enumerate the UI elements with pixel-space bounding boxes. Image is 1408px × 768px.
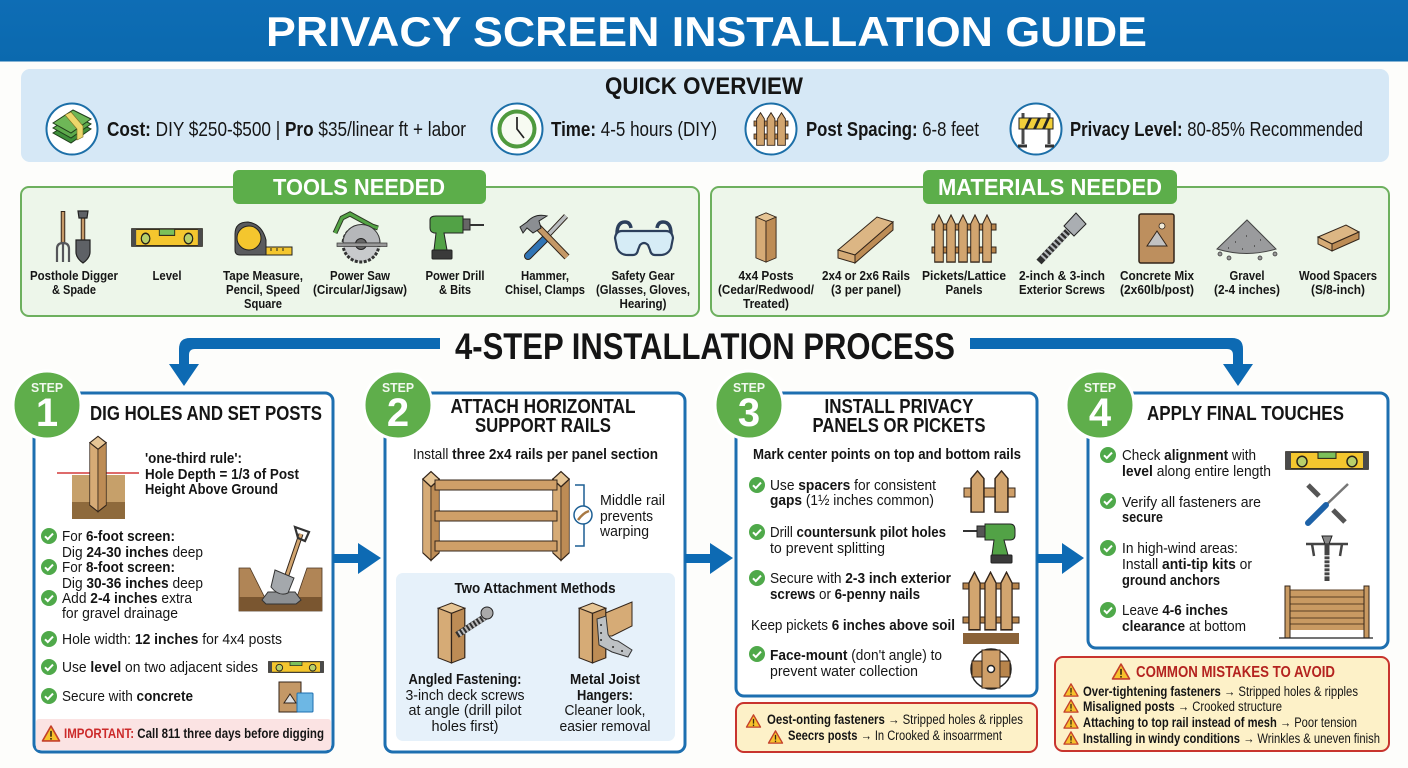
tool: tape measure: Pencil, Speed [226, 282, 300, 297]
checklist: depth items: For 6-foot screen: [62, 528, 175, 545]
method: metal joist hangers [560, 602, 650, 735]
tool: posthole digger and spade: & Spade [52, 282, 96, 297]
text: post spacing: Post Spacing: 6-8 feet [806, 119, 979, 141]
item: face-mount [749, 646, 1011, 689]
material: screws: Exterior Screws [1019, 282, 1105, 297]
item: face-mount: prevent water collection [770, 663, 918, 680]
material: screws: 2-inch & 3-inch [1019, 268, 1105, 283]
text: one-third rule: Height Above Ground [145, 481, 278, 498]
text: one-third rule: 'one-third rule': [145, 450, 242, 467]
list: mistakes: Attaching to top rail instead of mesh → Poor tension [1083, 715, 1357, 730]
item: pilot holes: Drill countersunk pilot holes [770, 524, 946, 541]
list: concrete [41, 682, 313, 712]
tool: power saw: Power Saw [330, 268, 391, 283]
icon: picket fence above soil [963, 572, 1019, 644]
item: clearance [1100, 602, 1246, 635]
arrow: step 1 to 2 [333, 543, 381, 574]
tool: safety gear: Safety Gear [612, 268, 674, 283]
text: keep pickets above soil: Keep pickets 6 inches above soil [751, 617, 955, 634]
panel: step 4 [1066, 371, 1388, 648]
tool: power saw [313, 214, 407, 297]
icon: barricade [1010, 104, 1062, 154]
arrow: step 3 to 4 [1037, 543, 1084, 574]
arrow: step 2 to 3 [685, 543, 733, 574]
list: mistakes [1064, 684, 1380, 746]
material: pickets: Pickets/Lattice [922, 268, 1006, 283]
item: fasteners [1100, 484, 1348, 526]
method: metal joist hangers: Metal Joist [570, 671, 640, 688]
item: pilot holes: to prevent splitting [770, 540, 885, 557]
diagram: rail frame [423, 472, 569, 560]
tool: safety gear [596, 222, 690, 311]
text: privacy level: Privacy Level: 80-85% Recommended [1070, 119, 1363, 141]
text: cost: Cost: DIY $250-$500 | Pro $35/linear ft + labor [107, 119, 466, 141]
checklist: depth items [41, 528, 203, 622]
icon: finished screen [1279, 586, 1373, 638]
item: pilot holes [749, 524, 1015, 563]
item: spacers: Use spacers for consistent [770, 477, 937, 494]
arrow: process right [970, 338, 1253, 386]
tool: power drill: & Bits [439, 282, 471, 297]
icon: fence [746, 104, 796, 154]
tool: hammer and chisel: Hammer, [521, 268, 569, 283]
tool: power drill: Power Drill [426, 268, 484, 283]
item: alignment [1100, 447, 1368, 480]
heading: step 3: PANELS OR PICKETS [812, 415, 986, 437]
item: alignment: level along entire length [1122, 463, 1271, 480]
checklist: depth items: Add 2-4 inches extra [62, 590, 193, 607]
panel: materials needed [711, 170, 1389, 316]
title: PRIVACY SCREEN INSTALLATION GUIDE [266, 8, 1147, 55]
tool: posthole digger and spade: Posthole Digger [30, 268, 118, 283]
badge: step 1: STEP [31, 381, 63, 395]
list: concrete: Secure with concrete [62, 688, 193, 705]
item: face-mount: Face-mount (don't angle) to [770, 647, 942, 664]
material: screws [1019, 213, 1105, 297]
tool: safety gear: Hearing) [620, 296, 666, 311]
callout: step 3 mistakes: Oest-onting fasteners → Stripped holes & ripples [767, 712, 1023, 727]
text: mark center points: Mark center points on top and bottom rails [753, 446, 1021, 463]
material: wood spacers: Wood Spacers [1299, 268, 1377, 283]
callout: middle rail: warping [599, 523, 649, 540]
header banner [0, 0, 1408, 62]
tool: posthole digger and spade [30, 211, 118, 297]
badge: step 2: 2 [387, 391, 409, 435]
text: one-third rule [145, 450, 299, 498]
material: gravel [1214, 220, 1280, 297]
badge: step 3 [715, 371, 783, 439]
callout: step 3 mistakes [736, 703, 1037, 752]
checklist: depth items: Dig 30-36 inches deep [62, 575, 203, 592]
panel: tools needed [21, 170, 699, 316]
tool: tape measure [223, 222, 303, 311]
material: rails: 2x4 or 2x6 Rails [822, 268, 910, 283]
item: exterior screws: Secure with 2-3 inch exterior [770, 570, 951, 587]
icon: clock [492, 104, 542, 154]
material: rails [822, 217, 910, 297]
item: exterior screws [749, 570, 951, 603]
item: high-wind: ground anchors [1122, 572, 1220, 589]
item: spacers [749, 471, 1015, 512]
list: mistakes: Installing in windy conditions → Wrinkles & uneven finish [1083, 731, 1380, 746]
list: level: Use level on two adjacent sides [62, 659, 258, 676]
badge: step 3: 3 [738, 391, 760, 435]
callout: middle rail [574, 485, 665, 546]
diagram: post in hole [57, 436, 139, 519]
callout: middle rail: Middle rail [600, 492, 665, 509]
heading: step 4: APPLY FINAL TOUCHES [1147, 403, 1344, 425]
heading: quick overview: QUICK OVERVIEW [605, 73, 803, 100]
material: concrete mix [1120, 214, 1195, 297]
heading: step 3 [812, 396, 986, 437]
tool: power drill [426, 216, 484, 297]
method: angled fastening: holes first) [432, 718, 499, 735]
method: metal joist hangers: Cleaner look, [564, 702, 646, 719]
badge: step 2 [364, 371, 432, 439]
method: angled fastening: 3-inch deck screws [406, 687, 524, 704]
item: high-wind: In high-wind areas: [1122, 540, 1238, 557]
heading: attachment methods: Two Attachment Methods [454, 580, 616, 597]
material: concrete mix: (2x60lb/post) [1120, 282, 1194, 297]
callout: important: IMPORTANT: Call 811 three days before digging [64, 725, 324, 741]
arrow: process left [169, 338, 440, 386]
tool: tape measure: Tape Measure, [223, 268, 303, 283]
method: metal joist hangers: Hangers: [577, 687, 633, 704]
item: fasteners: Verify all fasteners are [1122, 494, 1261, 511]
tool: hammer and chisel: Chisel, Clamps [505, 282, 585, 297]
tool: level: Level [152, 268, 182, 283]
tool: hammer and chisel [505, 215, 585, 297]
item: clearance: clearance at bottom [1122, 618, 1246, 635]
badge: step 3: STEP [733, 381, 765, 395]
callout: important [36, 719, 331, 750]
heading: step 2: SUPPORT RAILS [475, 415, 611, 437]
badge: step 4: 4 [1089, 391, 1112, 435]
heading: step 2: ATTACH HORIZONTAL [450, 396, 636, 418]
method: angled fastening: at angle (drill pilot [408, 702, 522, 719]
tool: tape measure: Square [244, 296, 282, 311]
badge: step 2: STEP [382, 381, 414, 395]
item: exterior screws: screws or 6-penny nails [770, 586, 920, 603]
panel: step 3 [715, 371, 1037, 696]
method: metal joist hangers: easier removal [560, 718, 650, 735]
badge: step 4: STEP [1084, 381, 1116, 395]
callout: middle rail: prevents [600, 508, 653, 525]
list: hole width: Hole width: 12 inches for 4x4 posts [62, 631, 282, 648]
heading: step 3: INSTALL PRIVACY [824, 396, 974, 418]
method: angled fastening: Angled Fastening: [408, 671, 522, 688]
panel: step 2 [364, 371, 685, 752]
text: install rails: Install three 2x4 rails per panel section [413, 446, 658, 463]
text: one-third rule: Hole Depth = 1/3 of Post [145, 466, 299, 483]
tool: power saw: (Circular/Jigsaw) [313, 282, 407, 297]
heading: common mistakes: COMMON MISTAKES TO AVOID [1136, 664, 1335, 681]
icon: money [46, 104, 98, 154]
panel: quick overview [21, 69, 1389, 162]
material: rails: (3 per panel) [831, 282, 901, 297]
list: mistakes: Over-tightening fasteners → Stripped holes & ripples [1083, 684, 1358, 699]
list: mistakes: Misaligned posts → Crooked structure [1083, 699, 1282, 714]
checklist: depth items: For 8-foot screen: [62, 559, 175, 576]
heading: step 1: DIG HOLES AND SET POSTS [90, 403, 322, 425]
checklist: depth items: for gravel drainage [62, 605, 178, 622]
heading: tools needed: TOOLS NEEDED [273, 174, 445, 200]
item: high-wind: Install anti-tip kits or [1122, 556, 1252, 573]
material: wood spacers [1299, 225, 1377, 297]
item: high-wind [1100, 536, 1348, 589]
heading: 4-step installation process: 4-STEP INSTALLATION PROCESS [455, 326, 955, 367]
panel: attachment methods [396, 573, 675, 741]
material: wood spacers: (S/8-inch) [1311, 282, 1365, 297]
checklist: depth items: Dig 24-30 inches deep [62, 544, 203, 561]
badge: step 1 [13, 371, 81, 439]
tool: level [132, 229, 202, 283]
method: angled fastening [406, 603, 524, 735]
badge: step 4 [1066, 371, 1134, 439]
badge: step 1: 1 [36, 391, 58, 435]
material: concrete mix: Concrete Mix [1120, 268, 1195, 283]
item: alignment: Check alignment with [1122, 447, 1256, 464]
text: time: Time: 4-5 hours (DIY) [551, 119, 717, 141]
heading: tools needed [233, 170, 486, 204]
callout: step 3 mistakes: Seecrs posts → In Crooked & insoarrment [788, 728, 1002, 743]
material: pickets [922, 215, 1006, 297]
item: fasteners: secure [1122, 509, 1163, 526]
panel: step 1 [13, 371, 333, 752]
material: gravel: Gravel [1230, 268, 1264, 283]
tool: safety gear: (Glasses, Gloves, [596, 282, 690, 297]
icon: shovel in trench [239, 527, 322, 611]
material: pickets: Panels [946, 282, 982, 297]
material: 4x4 posts: Treated) [743, 296, 789, 311]
item: clearance: Leave 4-6 inches [1122, 602, 1228, 619]
heading: materials needed: MATERIALS NEEDED [938, 174, 1162, 200]
material: 4x4 posts: (Cedar/Redwood/ [718, 282, 814, 297]
material: 4x4 posts: 4x4 Posts [738, 268, 794, 283]
heading: step 2 [450, 396, 636, 437]
material: 4x4 posts [718, 213, 814, 311]
callout: common mistakes [1055, 657, 1389, 751]
material: gravel: (2-4 inches) [1214, 282, 1280, 297]
item: spacers: gaps (1½ inches common) [770, 492, 934, 509]
